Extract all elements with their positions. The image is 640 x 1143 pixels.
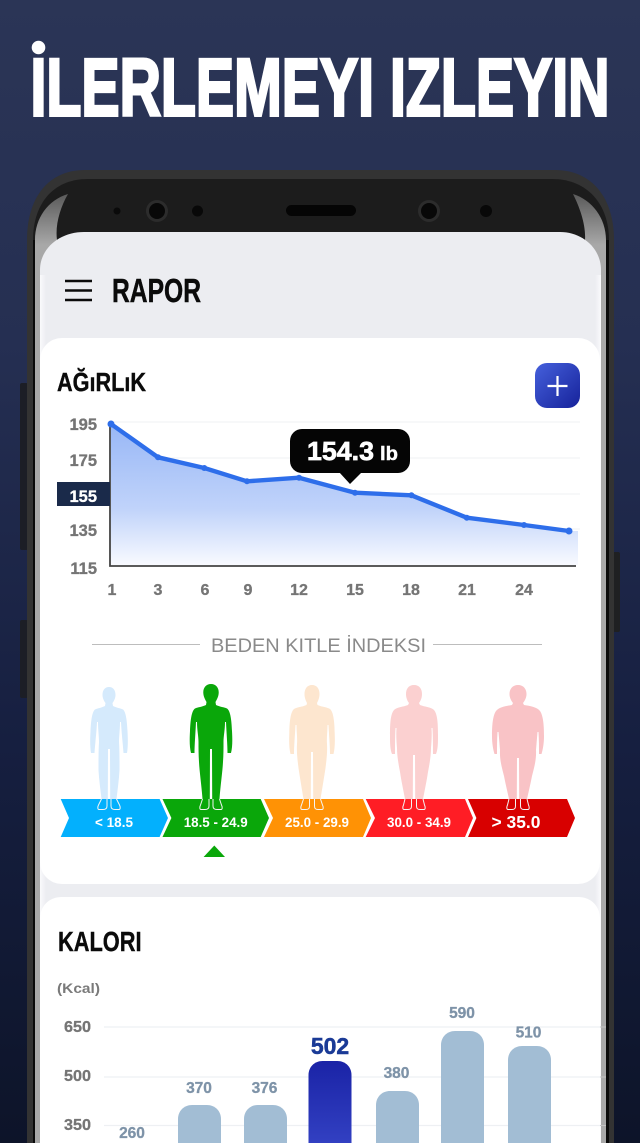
figure: obese bbox=[390, 685, 438, 810]
phone screen bbox=[40, 232, 601, 1143]
y axis labels bbox=[64, 1019, 91, 1134]
bar values: 502 bbox=[311, 1033, 349, 1059]
bar values: 376 bbox=[252, 1080, 278, 1097]
tooltip bbox=[290, 429, 410, 484]
bar values: 370 bbox=[186, 1080, 212, 1097]
x axis labels: 15 bbox=[346, 582, 364, 599]
y axis labels: 175 bbox=[69, 452, 97, 470]
x axis labels: 1 bbox=[108, 582, 117, 599]
y axis labels: 155 bbox=[69, 488, 97, 506]
icon: hamburger menu bbox=[65, 281, 92, 300]
tooltip: lb bbox=[380, 444, 398, 465]
weight line bbox=[108, 420, 572, 534]
bar values: 380 bbox=[384, 1065, 409, 1082]
bar values: 510 bbox=[516, 1024, 541, 1042]
button: add bbox=[535, 363, 580, 408]
x axis labels: 21 bbox=[458, 582, 476, 599]
x axis labels: 18 bbox=[402, 582, 420, 599]
app header bbox=[65, 272, 201, 309]
heading: weight: AĞıRLıK bbox=[57, 367, 146, 397]
panel: calories bbox=[40, 897, 606, 1143]
BMI scale arrows: < 18.5 bbox=[95, 815, 133, 830]
figure: underweight bbox=[90, 687, 128, 810]
bars bbox=[178, 1031, 551, 1143]
BMI scale arrows bbox=[61, 799, 575, 837]
panel: weight and BMI bbox=[40, 338, 600, 884]
tooltip: 154.3 bbox=[307, 436, 374, 466]
y axis labels: 195 bbox=[69, 416, 97, 434]
heading: calories: KALORI bbox=[58, 926, 142, 957]
y axis labels: 115 bbox=[70, 560, 97, 578]
y axis labels: 650 bbox=[64, 1019, 91, 1036]
figure: normal bbox=[190, 684, 232, 810]
x axis labels: 12 bbox=[290, 582, 308, 599]
phone frame bbox=[20, 170, 620, 1143]
bar values: 260 bbox=[119, 1125, 145, 1142]
bar values: 590 bbox=[449, 1005, 475, 1022]
bar chart: calories bbox=[64, 1005, 606, 1143]
y axis labels: 135 bbox=[69, 522, 97, 540]
BMI scale arrows: 25.0 - 29.9 bbox=[285, 815, 349, 830]
bar values bbox=[119, 1005, 541, 1142]
y axis labels: 500 bbox=[64, 1068, 91, 1085]
x axis labels: 9 bbox=[244, 582, 253, 599]
x axis labels bbox=[108, 582, 533, 599]
front camera and speaker bbox=[114, 200, 492, 222]
BMI scale arrows: > 35.0 bbox=[492, 812, 541, 832]
y axis labels: 350 bbox=[64, 1117, 91, 1134]
x axis labels: 24 bbox=[515, 582, 533, 599]
unit label: (Kcal) bbox=[57, 980, 100, 996]
y axis labels bbox=[69, 416, 97, 578]
figure: overweight bbox=[289, 685, 335, 810]
figure: severely obese bbox=[492, 685, 544, 810]
BMI heading: BEDEN KITLE İNDEKSI bbox=[211, 636, 426, 657]
line chart: weight bbox=[57, 416, 580, 599]
heading: RAPOR: RAPOR bbox=[112, 272, 201, 309]
x axis labels: 3 bbox=[154, 582, 163, 599]
BMI scale arrows: 18.5 - 24.9 bbox=[184, 815, 248, 830]
BMI scale arrows: 30.0 - 34.9 bbox=[387, 815, 451, 830]
marker: current BMI bbox=[204, 846, 225, 857]
x axis labels: 6 bbox=[201, 582, 210, 599]
